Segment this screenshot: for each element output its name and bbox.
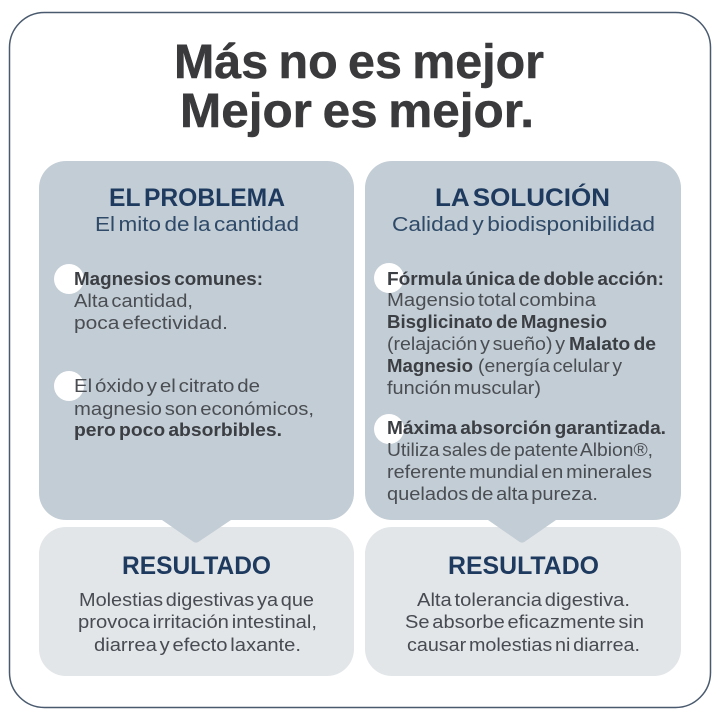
text: maxima absorcion: Utiliza sales de patente Albion®,: [387, 440, 653, 460]
text: maxima absorcion: Máxima absorción garantizada.: [387, 418, 666, 438]
text: formula unica: Magnesio: [387, 356, 473, 376]
text: magnesios comunes: poca efectividad.: [74, 313, 228, 333]
text: formula unica: Bisglicinato de Magnesio: [387, 312, 607, 332]
text: result left body: [78, 590, 317, 655]
text: magnesios comunes: [74, 269, 263, 333]
text: maxima absorcion: quelados de alta pureza.: [387, 484, 598, 504]
text: result left body: Molestias digestivas ya que: [79, 590, 314, 610]
text: result right body: Alta tolerancia digestiva.: [417, 590, 630, 610]
text: oxido y citrato: pero poco absorbibles.: [74, 420, 282, 440]
text: maxima absorcion: [387, 418, 666, 504]
heading: el problema: EL PROBLEMA: [109, 184, 285, 212]
text: result left body: provoca irritación intestinal,: [78, 612, 317, 632]
heading: la solucion: LA SOLUCIÓN: [435, 182, 610, 212]
text: result right body: Se absorbe eficazmente sin: [405, 612, 644, 632]
bullet: magnesios comunes: [54, 264, 84, 294]
panel: result right: [365, 527, 681, 676]
text: magnesios comunes: Alta cantidad,: [74, 291, 193, 311]
text: formula unica: [387, 269, 664, 398]
text: oxido y citrato: magnesio son económicos,: [74, 399, 314, 419]
text: oxido y citrato: [74, 376, 314, 440]
text: result right body: causar molestias ni diarrea.: [407, 635, 640, 655]
heading: resultado right: RESULTADO: [448, 552, 599, 580]
bullet: formula: [374, 263, 404, 293]
panel: la solucion: [365, 161, 681, 542]
text: result left body: diarrea y efecto laxante.: [94, 635, 301, 655]
panel: el problema: [39, 161, 354, 542]
title: Más no es mejor: [174, 36, 544, 89]
heading: resultado left: RESULTADO: [122, 552, 271, 580]
text: formula unica: función muscular): [387, 378, 541, 398]
subheading: calidad: Calidad y biodisponibilidad: [392, 213, 655, 236]
subheading: mito: El mito de la cantidad: [95, 213, 299, 236]
text: formula unica: Fórmula única de doble acción:: [387, 269, 664, 289]
text: result right body: [405, 590, 644, 655]
text: formula unica: Magensio total combina: [387, 290, 597, 310]
bullet: absorcion: [374, 414, 404, 444]
bullet: oxido: [54, 371, 84, 401]
title: Mejor es mejor.: [180, 85, 534, 138]
title: [174, 36, 544, 138]
text: formula unica: (energía celular y: [478, 356, 622, 376]
text: magnesios comunes: Magnesios comunes:: [74, 269, 263, 289]
panel: result left: [39, 527, 354, 676]
text: formula unica: Malato de: [569, 334, 656, 354]
text: oxido y citrato: El óxido y el citrato de: [74, 376, 260, 396]
text: maxima absorcion: referente mundial en minerales: [387, 462, 652, 482]
text: formula unica: (relajación y sueño) y: [387, 334, 565, 354]
